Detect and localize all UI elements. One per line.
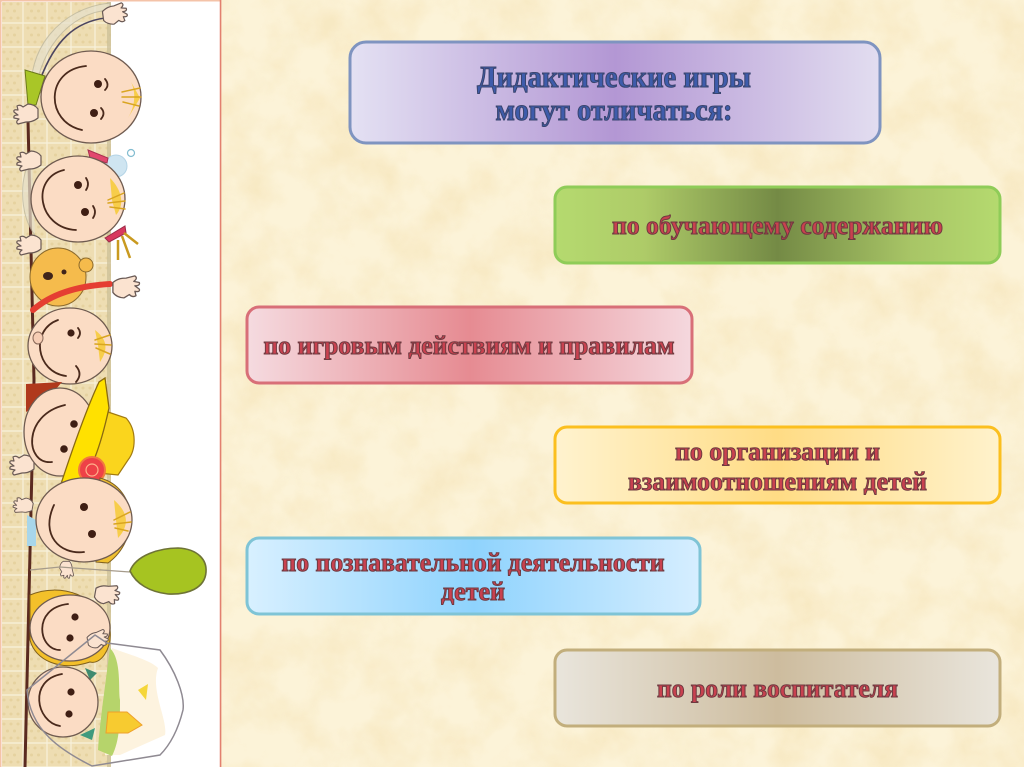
patterned strip xyxy=(2,2,111,767)
title text: Дидактические игры xyxy=(477,59,751,94)
panel: left children strip xyxy=(0,0,221,767)
box: cognitive activity: детей xyxy=(441,577,505,606)
hat xyxy=(59,378,134,504)
child 6 xyxy=(30,582,121,666)
child 2 xyxy=(17,150,138,260)
box: cognitive activity xyxy=(247,538,700,614)
bear xyxy=(30,248,93,306)
box: educator role xyxy=(555,650,1000,726)
box: learning content: по обучающему содержанию xyxy=(612,211,943,240)
child 7 xyxy=(28,667,98,740)
box: organisation and relationships xyxy=(555,427,1000,503)
child 1 xyxy=(14,2,141,143)
red arm and hand xyxy=(33,276,139,310)
box: organisation and relationships: по организации и xyxy=(675,437,880,466)
box: cognitive activity: по познавательной деятельности xyxy=(282,548,665,577)
balloon xyxy=(30,548,206,594)
box: game actions and rules: по игровым действиям и правилам xyxy=(264,331,674,360)
child 4 with hat xyxy=(10,378,134,504)
box: learning content xyxy=(555,187,1000,263)
title text xyxy=(477,59,751,127)
title box xyxy=(350,42,880,143)
box: game actions and rules xyxy=(247,307,692,383)
box: educator role: по роли воспитателя xyxy=(657,674,898,703)
bucket with picture xyxy=(27,635,183,766)
child 5 xyxy=(12,478,132,578)
box: organisation and relationships: взаимоотношениям детей xyxy=(628,467,927,496)
pole xyxy=(25,120,34,767)
title text: могут отличаться: xyxy=(496,92,732,127)
child 3 xyxy=(28,308,112,384)
